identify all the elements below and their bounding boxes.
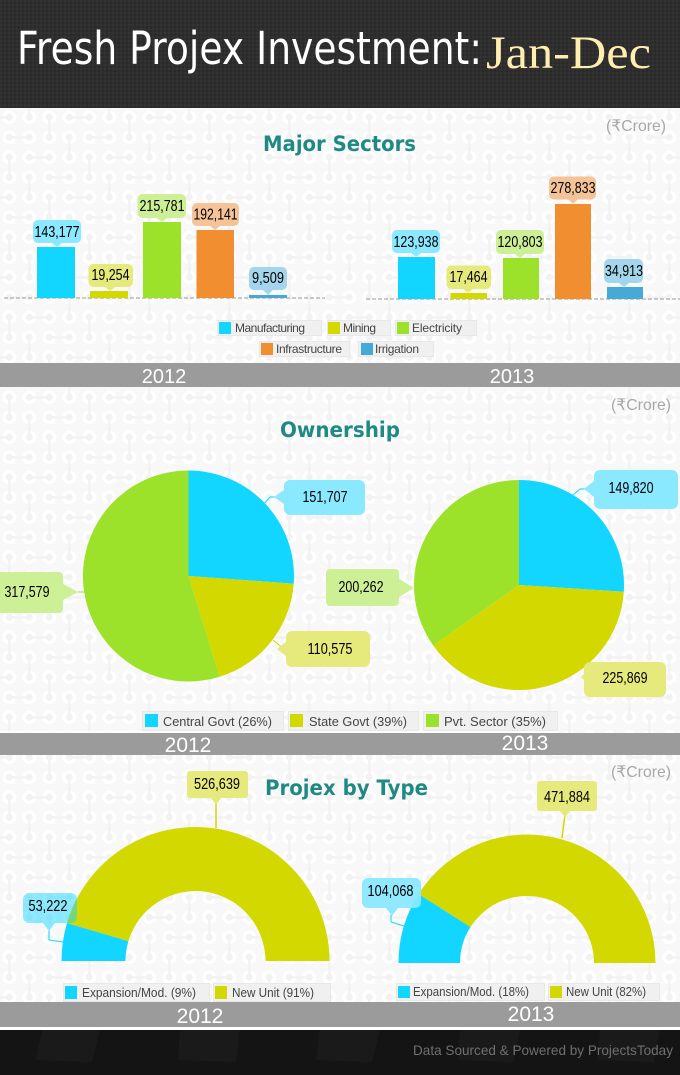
legend: ownership: Central Govt (26%) — [163, 714, 272, 729]
footer source text: Data Sourced & Powered by ProjectsToday — [413, 1042, 673, 1058]
callout: new unit 2013 — [537, 781, 597, 817]
panel: major sectors — [0, 118, 680, 388]
callout: private sector 2012: 317,579 — [4, 584, 50, 601]
year bar: type: 2013 — [508, 1003, 554, 1026]
year bar: major sectors: 2012 — [142, 366, 186, 388]
legend: sectors: Infrastructure — [276, 342, 342, 356]
callout: new unit 2012 — [187, 771, 248, 805]
value: electricity 2012 — [138, 194, 186, 222]
legend: type 2013: New Unit (82%) — [566, 984, 646, 999]
pie chart: ownership 2013 — [326, 470, 678, 697]
value: irrigation 2013: 34,913 — [605, 263, 643, 280]
header band — [0, 0, 680, 108]
callout: expansion 2013: 104,068 — [368, 883, 414, 900]
value: manufacturing 2013: 123,938 — [394, 234, 438, 251]
callout: new unit 2012: 526,639 — [194, 776, 240, 793]
value: infrastructure 2012: 192,141 — [194, 206, 238, 224]
callout: private sector 2012 — [0, 572, 84, 613]
value: infrastructure 2013 — [549, 176, 596, 204]
year bar: ownership: 2013 — [502, 732, 548, 755]
legend: sectors — [218, 320, 476, 356]
callout: central govt 2013: 149,820 — [608, 480, 654, 497]
year bar: major sectors — [0, 363, 680, 388]
year bar: ownership: 2012 — [165, 734, 211, 757]
value: mining 2013 — [446, 266, 491, 293]
callout: private sector 2013: 200,262 — [338, 579, 384, 596]
value: mining 2012: 19,254 — [92, 267, 130, 284]
legend: ownership: Pvt. Sector (35%) — [444, 714, 546, 729]
value: mining 2013: 17,464 — [450, 269, 488, 286]
bar chart: 2013 sectors — [366, 176, 680, 299]
callout: state govt 2013 — [581, 662, 666, 697]
callout: expansion 2012 — [23, 893, 77, 942]
callout: private sector 2013 — [326, 569, 414, 606]
panel: projex by type — [0, 764, 680, 1028]
callout: state govt 2013: 225,869 — [602, 670, 648, 687]
legend: ownership: State Govt (39%) — [309, 714, 407, 729]
callout: central govt 2012 — [263, 480, 365, 515]
legend: sectors: Irrigation — [375, 342, 419, 356]
callout: state govt 2012 — [273, 631, 370, 667]
footer band — [0, 1030, 680, 1075]
panel: ownership — [0, 397, 680, 757]
legend: type 2013 — [396, 984, 660, 1000]
title date range: Jan-Dec — [486, 27, 651, 79]
heading: projex by type: Projex by Type — [265, 776, 428, 800]
callout: expansion 2013 — [362, 878, 421, 926]
value: irrigation 2013 — [604, 259, 643, 287]
legend: sectors: Manufacturing — [235, 321, 305, 335]
heading: major sectors: Major Sectors — [263, 132, 416, 156]
donut chart: type 2012 — [23, 771, 330, 961]
pie chart: ownership 2012 — [0, 470, 370, 682]
unit label: (₹Crore) — [611, 397, 671, 414]
callout: central govt 2013 — [573, 470, 678, 509]
year bar: major sectors: 2013 — [490, 366, 534, 388]
heading: ownership: Ownership — [280, 418, 400, 442]
value: electricity 2013 — [496, 230, 544, 258]
legend: sectors: Mining — [343, 321, 376, 335]
legend: type 2012 — [64, 984, 330, 1002]
value: manufacturing 2012: 143,177 — [34, 224, 80, 241]
legend: type 2013: Expansion/Mod. (18%) — [413, 984, 529, 999]
white separator — [0, 1027, 680, 1030]
value: mining 2012 — [88, 264, 133, 291]
value: irrigation 2012: 9,509 — [252, 270, 284, 287]
value: manufacturing 2012 — [33, 220, 81, 247]
callout: central govt 2012: 151,707 — [302, 489, 348, 506]
callout: new unit 2013: 471,884 — [544, 789, 590, 806]
title: Fresh Projex Investment: — [17, 22, 482, 75]
callout: state govt 2012: 110,575 — [308, 641, 352, 658]
legend: type 2012: New Unit (91%) — [232, 985, 314, 1000]
value: manufacturing 2013 — [392, 230, 440, 257]
legend: ownership — [142, 712, 558, 730]
value: electricity 2012: 215,781 — [140, 198, 184, 215]
legend: sectors: Electricity — [412, 321, 462, 335]
donut chart: type 2013 — [362, 781, 656, 963]
value: infrastructure 2013: 278,833 — [550, 180, 596, 197]
year bar: ownership — [0, 731, 680, 757]
year bar: type: 2012 — [177, 1005, 223, 1028]
bar chart: 2012 sectors — [4, 194, 325, 298]
unit label: (₹Crore) — [611, 764, 671, 781]
value: irrigation 2012 — [249, 267, 287, 295]
year bar: type — [0, 1002, 680, 1028]
callout: expansion 2012: 53,222 — [28, 898, 68, 915]
unit label: (₹Crore) — [606, 118, 666, 135]
legend: type 2012: Expansion/Mod. (9%) — [82, 985, 196, 1000]
value: infrastructure 2012 — [192, 203, 239, 230]
value: electricity 2013: 120,803 — [498, 234, 542, 251]
